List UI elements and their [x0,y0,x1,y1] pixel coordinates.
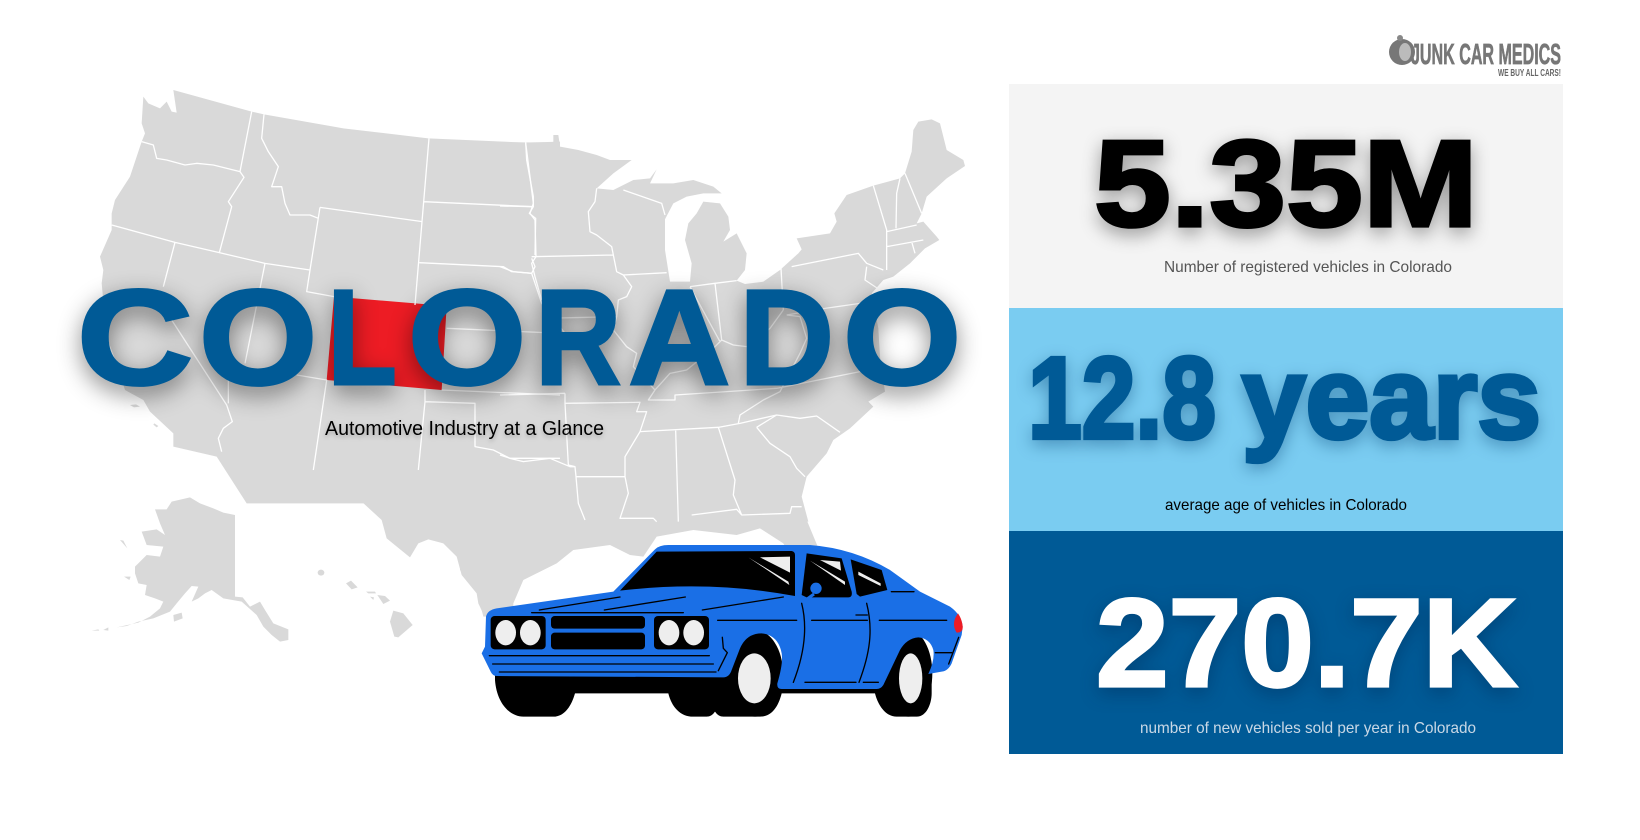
car illustration [482,545,963,717]
title: L [328,263,397,413]
car body lines [489,592,959,682]
logo tagline: WE BUY ALL CARS! [1498,68,1561,79]
caption: average age: average age of vehicles in Colorado [1165,497,1407,514]
title: D [739,263,834,413]
caption: new vehicles sold: number of new vehicles sold per year in Colorado [1140,720,1476,737]
stat: 12.8 years: 12.8 [1028,334,1216,464]
title: C [77,263,193,413]
title: O [843,263,961,413]
side mirror [807,583,822,599]
caption: registered vehicles: Number of registered vehicles in Colorado [1164,259,1452,276]
car windows [620,551,887,597]
title: A [628,263,730,413]
title [77,263,961,413]
title: R [535,263,621,413]
title: O [408,263,526,413]
panel: registered vehicles [1009,84,1563,308]
car wheels and underbody [495,630,932,717]
window glare [748,557,881,586]
tail light [954,613,963,633]
subtitle: Automotive Industry at a Glance [325,418,604,440]
stat: 12.8 years: years [1242,334,1541,464]
car front grille and headlights [491,616,709,649]
map: United States [92,90,965,642]
wheel hubs [738,653,922,703]
panel: new vehicles sold [1009,531,1563,754]
stat: 5.35M: 5.35M [1094,114,1478,252]
stat: 270.7K: 270.7K [1096,573,1517,713]
stat: 12.8 years [1028,334,1541,464]
title: O [199,263,317,413]
panel: average age [1009,308,1563,532]
logo: Junk Car Medics [1389,35,1561,79]
logo icon: tyre [1389,35,1415,65]
car body [482,545,963,689]
